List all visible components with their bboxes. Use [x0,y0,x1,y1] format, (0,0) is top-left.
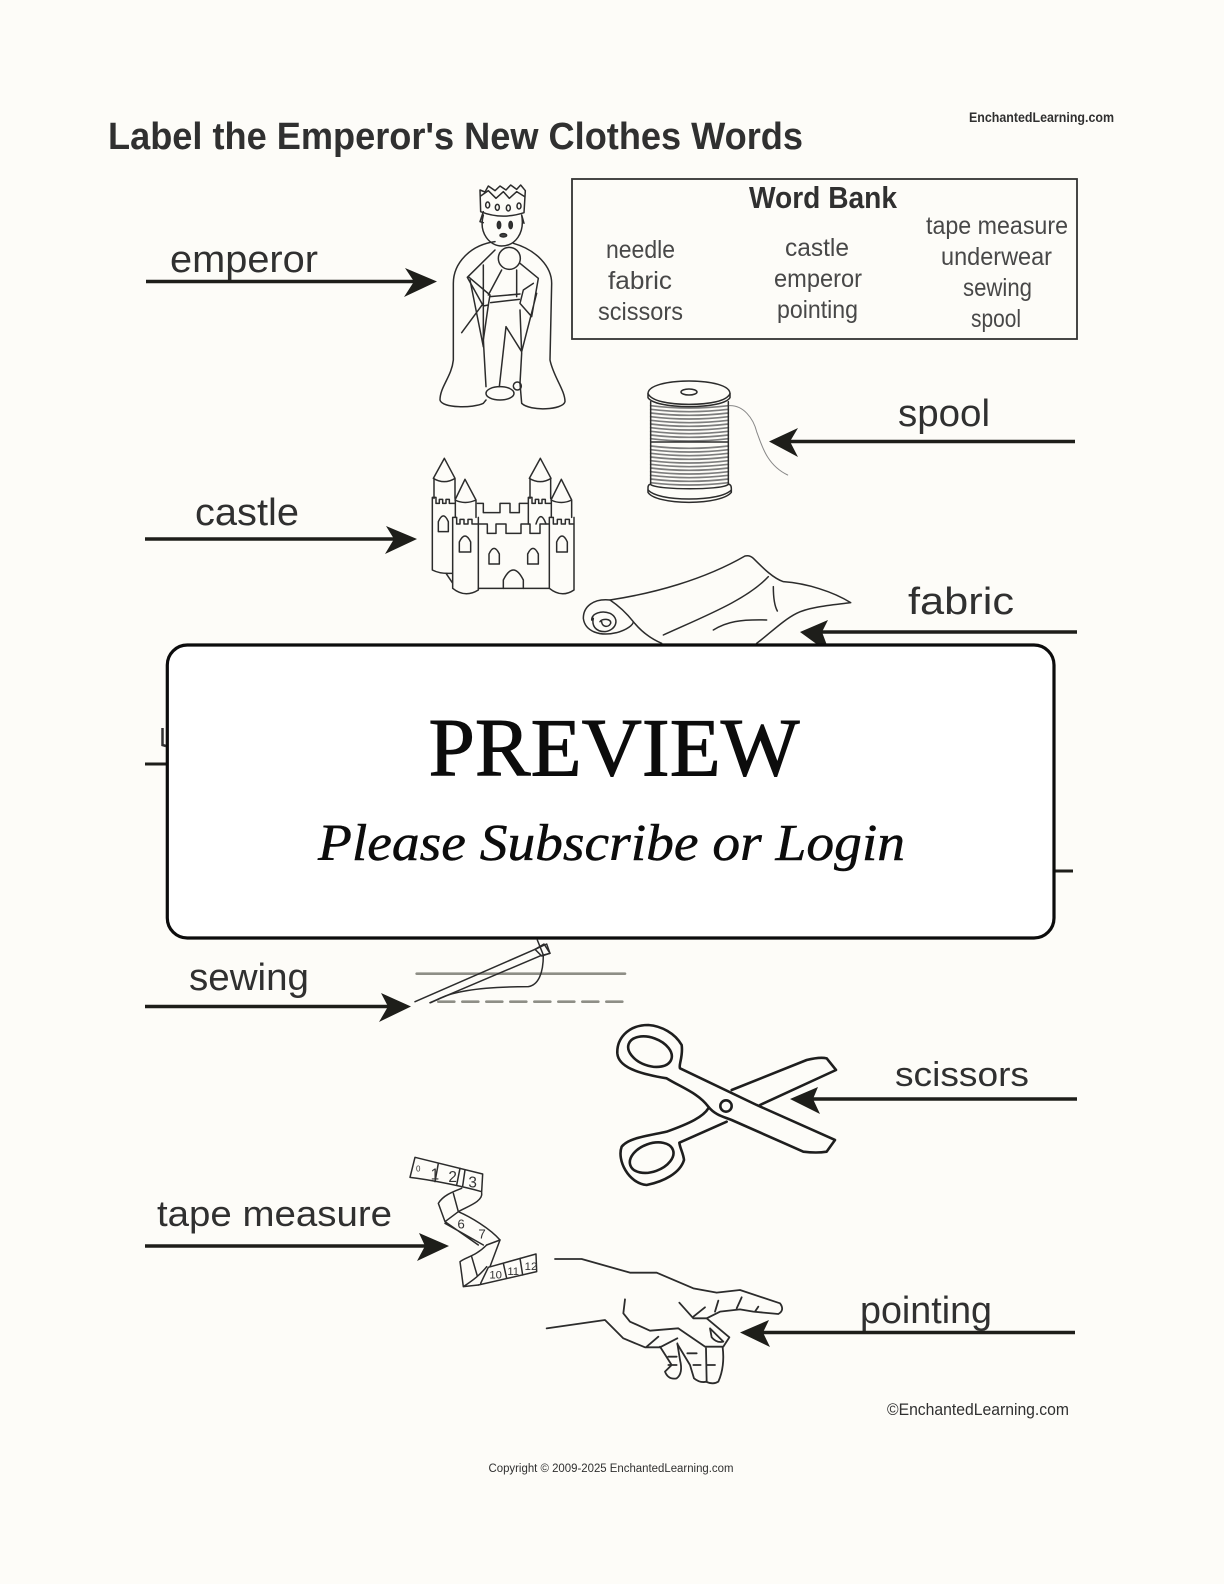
icon: castle [432,458,574,594]
icon: tape measure: 10 [489,1269,502,1281]
arrow: emperor [146,268,437,297]
icon: emperor [440,185,565,409]
icon: sewing [415,940,625,1003]
label: pointing: pointing [860,1290,992,1332]
worksheet credit: ©EnchantedLearning.com [887,1400,1069,1419]
word bank column 3: spool [971,305,1021,333]
icon: tape measure: 1 [431,1166,439,1183]
word bank column 3: sewing [963,274,1032,302]
arrow: spool [769,428,1075,457]
arrow: castle [145,526,417,554]
icon: fabric [583,556,851,643]
label: spool: spool [898,393,990,435]
panel: preview overlay [167,645,1054,938]
word bank column 3: tape measure [926,212,1068,240]
word bank column 1: fabric [608,267,672,295]
arrow: pointing [740,1320,1075,1347]
word bank heading: Word Bank [749,180,898,215]
word bank column 2: emperor [774,265,862,293]
icon: scissors [617,1025,836,1185]
icon: tape measure [410,1157,537,1287]
arrow: fabric [800,620,1077,648]
icon: tape measure: 6 [457,1216,465,1231]
arrow: sewing [145,993,411,1022]
word bank column 1: scissors [598,298,683,326]
arrow fragment: underwear [145,762,168,766]
icon: tape measure: 2 [448,1169,457,1186]
preview heading: PREVIEW [428,702,800,794]
icon: tape measure: 7 [478,1226,486,1241]
copyright footer: Copyright © 2009-2025 EnchantedLearning.com [488,1463,734,1475]
word bank column 3: underwear [941,243,1052,271]
word bank column 2: pointing [777,296,858,324]
icon: tape measure: 0 [416,1165,421,1174]
label: emperor: emperor [170,239,318,281]
label: tape measure: tape measure [157,1193,392,1234]
word bank column 1: needle [606,236,675,264]
label: sewing: sewing [189,957,309,999]
label: castle: castle [195,492,299,534]
icon: tape measure: 11 [507,1266,519,1278]
label fragment: underwear [162,728,166,746]
icon: pointing hand [547,1259,782,1383]
icon: tape measure: 3 [468,1174,477,1191]
arrow fragment: needle [1054,870,1073,872]
icon: spool [648,381,788,502]
arrow: tape measure [145,1233,449,1261]
arrow: scissors [790,1087,1077,1114]
panel: word bank [572,179,1077,339]
word bank column 2: castle [785,234,849,262]
site credit top: EnchantedLearning.com [969,109,1114,125]
word bank column 1 [598,236,683,326]
title: Label the Emperor's New Clothes Words [108,116,803,158]
label: fabric: fabric [908,581,1014,623]
preview message: Please Subscribe or Login [317,815,905,872]
icon: tape measure: 12 [525,1261,537,1273]
word bank column 3 [926,212,1068,333]
label: scissors: scissors [895,1056,1029,1094]
word bank column 2 [774,234,862,324]
